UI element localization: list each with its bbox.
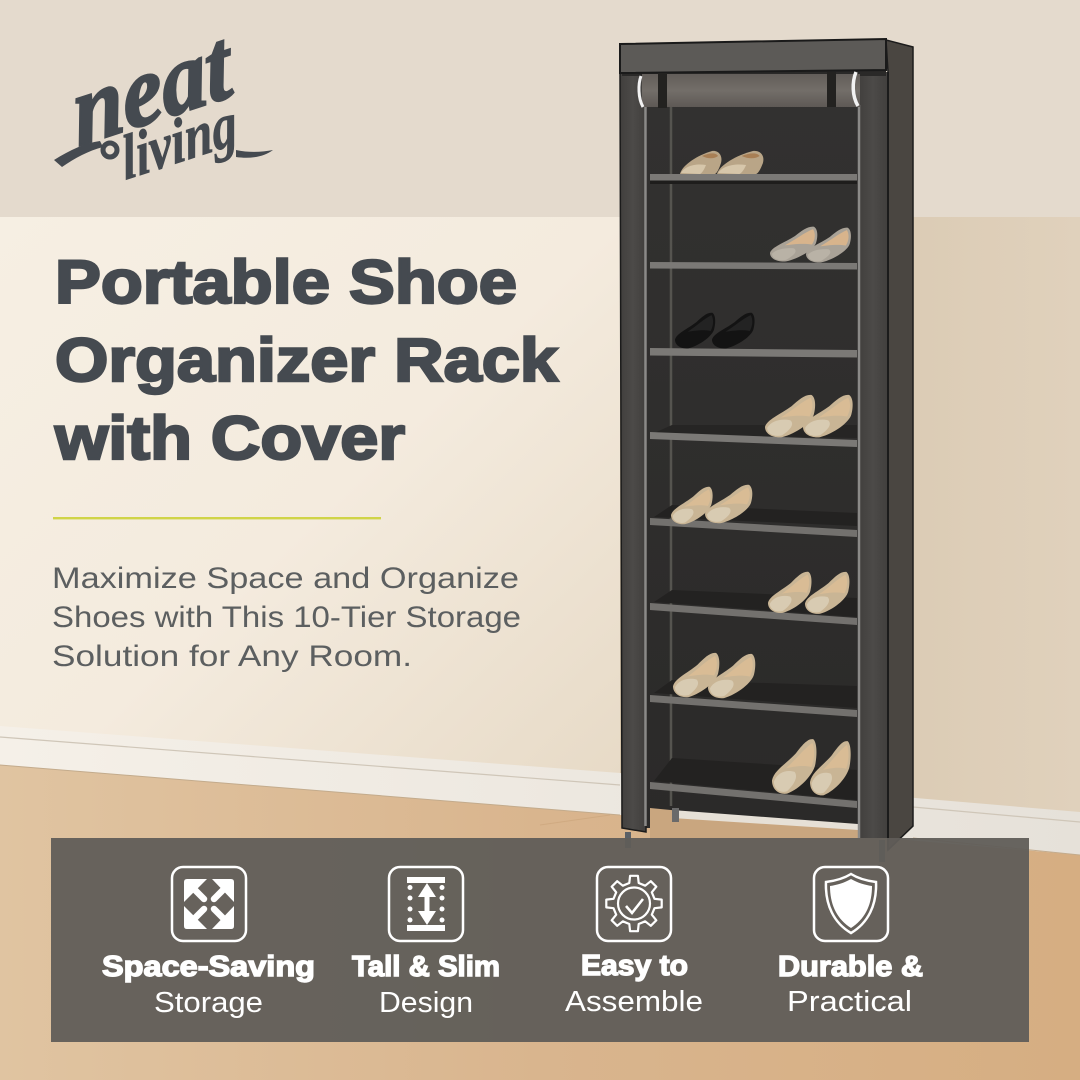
feature panel [51,838,1029,1042]
feature: space-saving storage [102,867,315,1019]
rack: right front curtain [858,72,888,838]
logo: neat living: living [117,87,241,194]
label: easy to assemble: Assemble [565,986,703,1018]
label: durable and practical [778,951,923,1018]
rack: interior back panel [645,100,860,828]
label: tall and slim design [352,951,500,1019]
rack: floor gap under bottom shelf [650,808,858,838]
icon: gear with check [597,867,671,941]
rack: backing behind roller [622,68,886,76]
rack: top header [620,39,886,73]
label: durable and practical: Practical [787,986,912,1018]
title: Portable Shoe [55,248,517,316]
icon: expand arrows [172,867,246,941]
shoe rack [620,39,913,862]
subtitle text: Shoes with This 10-Tier Storage [52,601,521,634]
rack: shelves [650,174,857,808]
feature: durable and practical [778,867,923,1018]
subtitle text: Solution for Any Room. [52,640,412,673]
rack: rolled cover [639,72,860,108]
rack: side panel [886,40,913,850]
title: Organizer Rack [55,326,558,394]
label: space-saving storage [102,951,315,1019]
subtitle text [52,562,521,673]
divider: accent rule [53,517,381,519]
title [54,248,558,472]
label: durable and practical: Durable & [778,951,923,983]
title: with Cover [54,404,405,472]
rack: feet [628,832,882,862]
rack: left front curtain [620,72,646,832]
subtitle text: Maximize Space and Organize [52,562,519,595]
label: space-saving storage: Space-Saving [102,951,315,983]
label: tall and slim design: Design [379,987,473,1019]
rack: white frame poles [646,105,859,838]
rack: left inner upright [670,105,672,806]
rack: shoes [671,151,853,795]
label: easy to assemble: Easy to [581,950,688,982]
logo: neat living: neat [66,8,239,168]
label: tall and slim design: Tall & Slim [352,951,500,983]
feature: easy to assemble [565,867,703,1018]
icon: height arrow [389,867,463,941]
feature: tall and slim design [352,867,500,1019]
icon: shield [814,867,888,941]
label: space-saving storage: Storage [154,987,263,1019]
label: easy to assemble [565,950,703,1018]
